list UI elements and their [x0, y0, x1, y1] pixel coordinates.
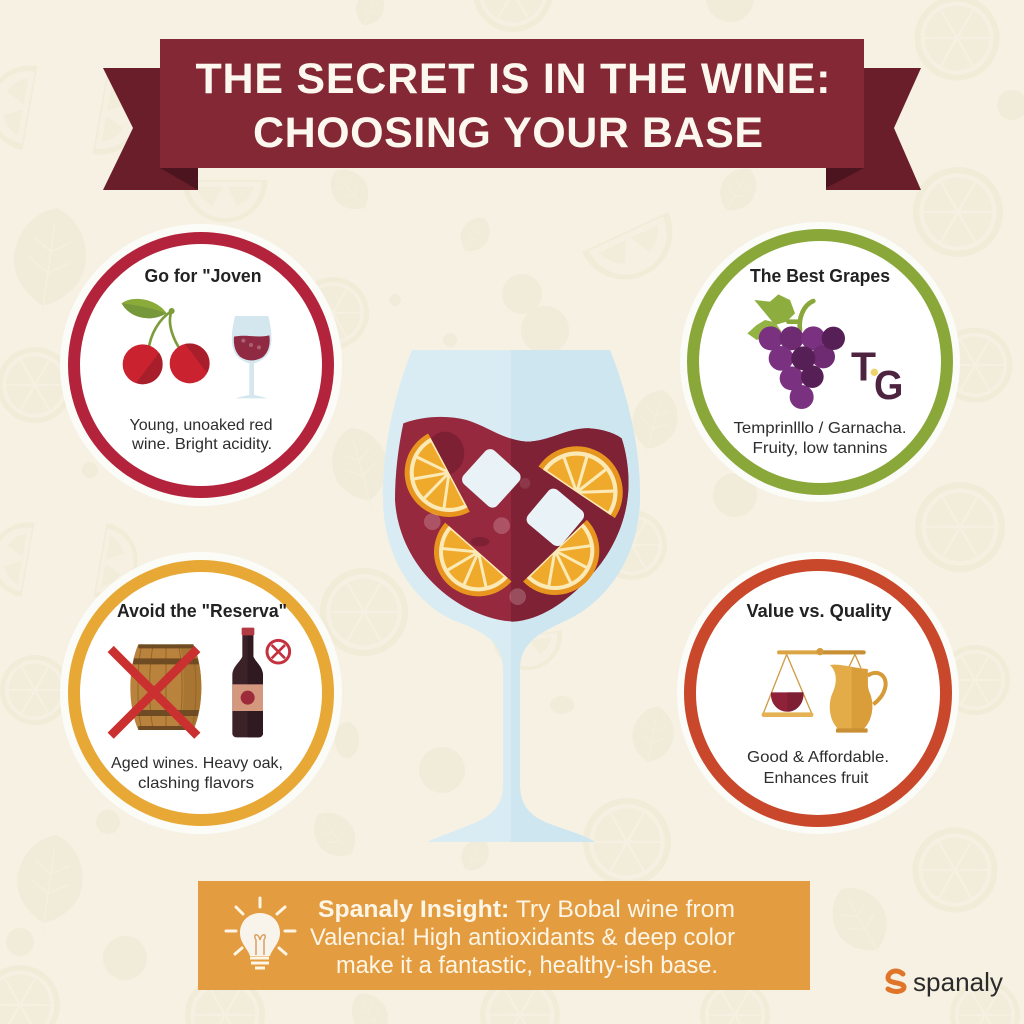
- bubbles: [424, 478, 530, 605]
- orange slice 3: [416, 523, 512, 615]
- insight text: [310, 896, 735, 979]
- logo: spanaly: [888, 967, 1003, 997]
- logo wordmark: spanaly: [913, 967, 1003, 997]
- description: [130, 417, 272, 453]
- glass body: [383, 350, 640, 842]
- icon: T G monogram: [851, 343, 903, 408]
- description: Fruity, low tannins: [752, 440, 888, 457]
- icon: T G monogram: T: [851, 343, 876, 389]
- title line 2: CHOOSING YOUR BASE: [253, 109, 763, 157]
- icon: wine glass: [232, 316, 271, 398]
- description: [111, 755, 283, 792]
- description: Aged wines. Heavy oak,: [111, 755, 283, 772]
- icon: balance scale: [762, 648, 864, 717]
- insight text: make it a fantastic, healthy-ish base.: [336, 952, 718, 979]
- orange slice 1: [389, 434, 470, 533]
- right ribbon fold: [826, 168, 864, 188]
- ice cube 1: [459, 446, 523, 510]
- orange slice 4: [523, 520, 618, 613]
- icon: grapes: [747, 294, 845, 409]
- heading: The Best Grapes: [750, 266, 890, 286]
- callout: Spanaly Insight: [198, 881, 810, 990]
- description: wine. Bright acidity.: [131, 436, 272, 453]
- icon: T G monogram: G: [874, 362, 903, 408]
- icon: wine bottle: [232, 628, 263, 737]
- wine glass: [383, 350, 641, 842]
- banner body: [160, 39, 864, 168]
- logo mark: [888, 971, 904, 991]
- description: Enhances fruit: [764, 770, 869, 787]
- dark reflections: [426, 432, 464, 475]
- title banner: [103, 39, 921, 190]
- panel: Value vs. Quality: [677, 552, 959, 834]
- description: Temprinlllo / Garnacha.: [734, 420, 906, 437]
- orange slice 2: [538, 428, 641, 518]
- insight text: Valencia! High antioxidants & deep color: [310, 924, 735, 951]
- title line 1: THE SECRET IS IN THE WINE:: [196, 55, 830, 103]
- left ribbon tail: [103, 68, 198, 190]
- description: clashing flavors: [138, 775, 254, 792]
- ice cube 2: [524, 486, 587, 549]
- icon: prohibited: [267, 640, 290, 663]
- left ribbon fold: [160, 168, 198, 190]
- heading: Avoid the "Reserva": [117, 601, 287, 621]
- panel: Avoid the Reserva: [60, 552, 342, 834]
- description: [747, 749, 889, 787]
- insight text: Spanaly Insight: Try Bobal wine from: [318, 896, 735, 923]
- sangria contents: [389, 417, 641, 622]
- wine: [395, 417, 629, 622]
- panel: Go for Joven: [60, 224, 342, 506]
- description: [734, 420, 906, 457]
- icon: cherries: [122, 299, 210, 384]
- right ribbon tail: [826, 68, 921, 190]
- icon: jug: [830, 665, 886, 733]
- panel: The Best Grapes: [680, 222, 960, 502]
- icon: light bulb: [226, 898, 295, 968]
- description: Good & Affordable.: [747, 749, 889, 766]
- description: Young, unoaked red: [130, 417, 272, 434]
- icon: crossed-out barrel: [111, 644, 201, 736]
- heading: Go for "Joven: [144, 266, 262, 286]
- heading: Value vs. Quality: [746, 601, 892, 621]
